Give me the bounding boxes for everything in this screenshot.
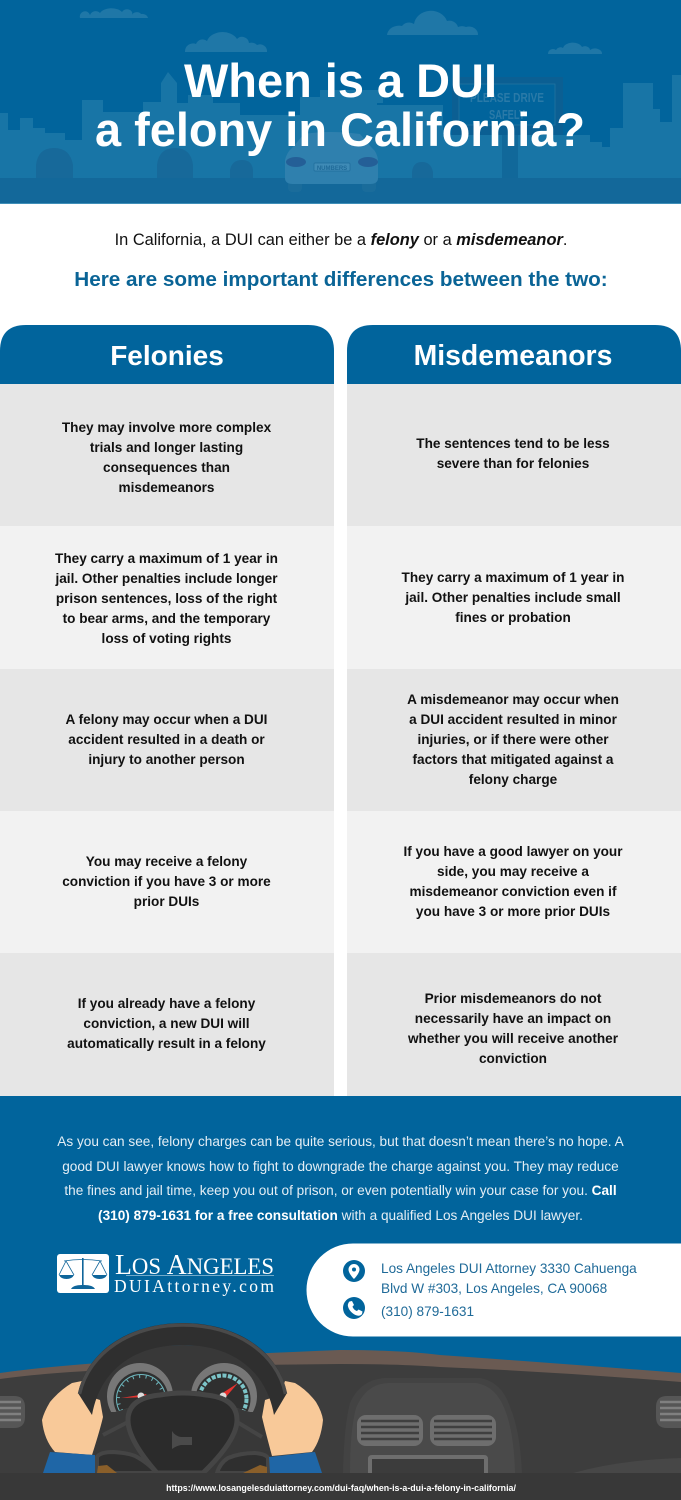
closing paragraph: As you can see, felony charges can be quite serious, but that doesn’t mean there’s no hope. A [57, 1134, 625, 1149]
header banner [0, 0, 681, 204]
intro sentence: In California, a DUI can either be a felony or a misdemeanor. [115, 231, 567, 249]
misdemeanor row 4: If you have a good lawyer on your [403, 844, 623, 859]
felony row 5 [0, 953, 334, 1096]
hands [42, 1381, 323, 1456]
felony row 5: conviction, a new DUI will [83, 1016, 250, 1031]
logo [57, 1250, 274, 1296]
source url: https://www.losangelesduiattorney.com/dui-faq/when-is-a-dui-a-felony-in-california/ [166, 1483, 516, 1493]
felony row 2: loss of voting rights [102, 631, 231, 646]
console screen [370, 1457, 486, 1473]
misdemeanor row 1: severe than for felonies [437, 456, 589, 471]
felony row 3: injury to another person [88, 752, 245, 767]
felony row 1 [0, 384, 334, 526]
wheel hub [128, 1393, 237, 1473]
felony row 1: misdemeanors [119, 480, 214, 495]
felony row 3 [0, 669, 334, 811]
title: a felony in California? [95, 104, 585, 157]
closing paragraph: the fines and jail time, keep you out of prison, or even potentially win your case for you. Call [64, 1183, 617, 1198]
felonies heading [0, 325, 334, 384]
felony row 4: You may receive a felony [86, 854, 248, 869]
distant cars [36, 148, 433, 178]
felony row 1: consequences than [103, 460, 230, 475]
felonies heading: Felonies [110, 340, 224, 371]
car rear: NUMBERS [317, 166, 347, 172]
misdemeanor row 5: whether you will receive another [407, 1031, 619, 1046]
road sign [452, 77, 563, 135]
misdemeanor row 2: They carry a maximum of 1 year in [402, 570, 624, 585]
panel: misdemeanors column [347, 325, 681, 1096]
misdemeanor row 4: misdemeanor conviction even if [410, 884, 617, 899]
panel: felonies column [0, 325, 334, 1096]
sign pole [502, 135, 518, 178]
footer background [0, 1096, 681, 1416]
misdemeanor row 4: you have 3 or more prior DUIs [416, 904, 610, 919]
logo: DUIAttorney.com [114, 1276, 274, 1296]
dashboard top [0, 1350, 681, 1500]
closing paragraph: (310) 879-1631 for a free consultation with a qualified Los Angeles DUI lawyer. [98, 1208, 583, 1223]
felony row 5: If you already have a felony [78, 996, 256, 1011]
left gauge [107, 1363, 172, 1412]
felony row 5: automatically result in a felony [67, 1036, 266, 1051]
car rear [285, 132, 378, 192]
misdemeanor row 5: necessarily have an impact on [415, 1011, 611, 1026]
misdemeanor row 3: injuries, or if there were other [417, 732, 609, 747]
icon: location pin [343, 1260, 365, 1282]
closing paragraph [57, 1134, 625, 1223]
subheading: Here are some important differences between the two: [74, 268, 608, 291]
misdemeanors heading: Misdemeanors [414, 340, 612, 372]
title: When is a DUI [184, 55, 497, 108]
title [95, 55, 585, 157]
side vents [0, 1396, 681, 1428]
road sign: SAFELY [489, 107, 525, 122]
misdemeanors heading [347, 325, 681, 384]
felony row 4: conviction if you have 3 or more [62, 874, 271, 889]
bottom strip [0, 1473, 681, 1500]
city skyline [0, 72, 681, 178]
misdemeanor row 2 [347, 526, 681, 669]
felony row 2 [0, 526, 334, 669]
misdemeanor row 4 [347, 811, 681, 953]
misdemeanor row 2: jail. Other penalties include small [404, 590, 621, 605]
icon: phone [343, 1297, 365, 1319]
contact panel [306, 1244, 681, 1336]
clouds [80, 8, 602, 54]
car dashboard [0, 1323, 681, 1500]
road sign: PLEASE DRIVE [470, 90, 544, 105]
felony row 4 [0, 811, 334, 953]
closing paragraph: good DUI lawyer knows how to fight to downgrade the charge against you. They may reduce [62, 1159, 619, 1174]
icon: scales of justice [57, 1254, 109, 1293]
misdemeanor row 5: Prior misdemeanors do not [425, 991, 602, 1006]
misdemeanor row 3: felony charge [469, 772, 558, 787]
misdemeanor row 1 [347, 384, 681, 526]
horn icon [172, 1431, 192, 1449]
misdemeanor row 2: fines or probation [455, 610, 571, 625]
right gauge [192, 1363, 257, 1412]
misdemeanor row 3: A misdemeanor may occur when [407, 692, 619, 707]
felony row 1: trials and longer lasting [90, 440, 243, 455]
misdemeanor row 3 [347, 669, 681, 811]
misdemeanor row 4: side, you may receive a [437, 864, 589, 879]
address and phone text [381, 1261, 637, 1319]
felony row 3: A felony may occur when a DUI [66, 712, 267, 727]
road [0, 178, 681, 203]
vents [357, 1415, 496, 1446]
felony row 2: jail. Other penalties include longer [54, 571, 278, 586]
address and phone text: (310) 879-1631 [381, 1304, 474, 1319]
misdemeanor row 3: factors that mitigated against a [413, 752, 614, 767]
address and phone text: Blvd W #303, Los Angeles, CA 90068 [381, 1281, 607, 1296]
logo: LOS ANGELES [115, 1250, 274, 1281]
felony row 2: to bear arms, and the temporary [63, 611, 271, 626]
sleeves [43, 1452, 322, 1473]
felony row 1: They may involve more complex [62, 420, 272, 435]
felony row 2: They carry a maximum of 1 year in [55, 551, 278, 566]
address and phone text: Los Angeles DUI Attorney 3330 Cahuenga [381, 1261, 637, 1276]
lower pods [97, 1452, 157, 1473]
wheel rim [78, 1323, 287, 1415]
center console [343, 1378, 522, 1473]
misdemeanor row 3: a DUI accident resulted in minor [409, 712, 618, 727]
felony row 3: accident resulted in a death or [68, 732, 265, 747]
steering wheel [42, 1323, 323, 1473]
misdemeanor row 5: conviction [479, 1051, 547, 1066]
spokes [103, 1422, 262, 1437]
felony row 2: prison sentences, loss of the right [56, 591, 278, 606]
misdemeanor row 5 [347, 953, 681, 1096]
misdemeanor row 1: The sentences tend to be less [416, 436, 610, 451]
felony row 4: prior DUIs [134, 894, 199, 909]
